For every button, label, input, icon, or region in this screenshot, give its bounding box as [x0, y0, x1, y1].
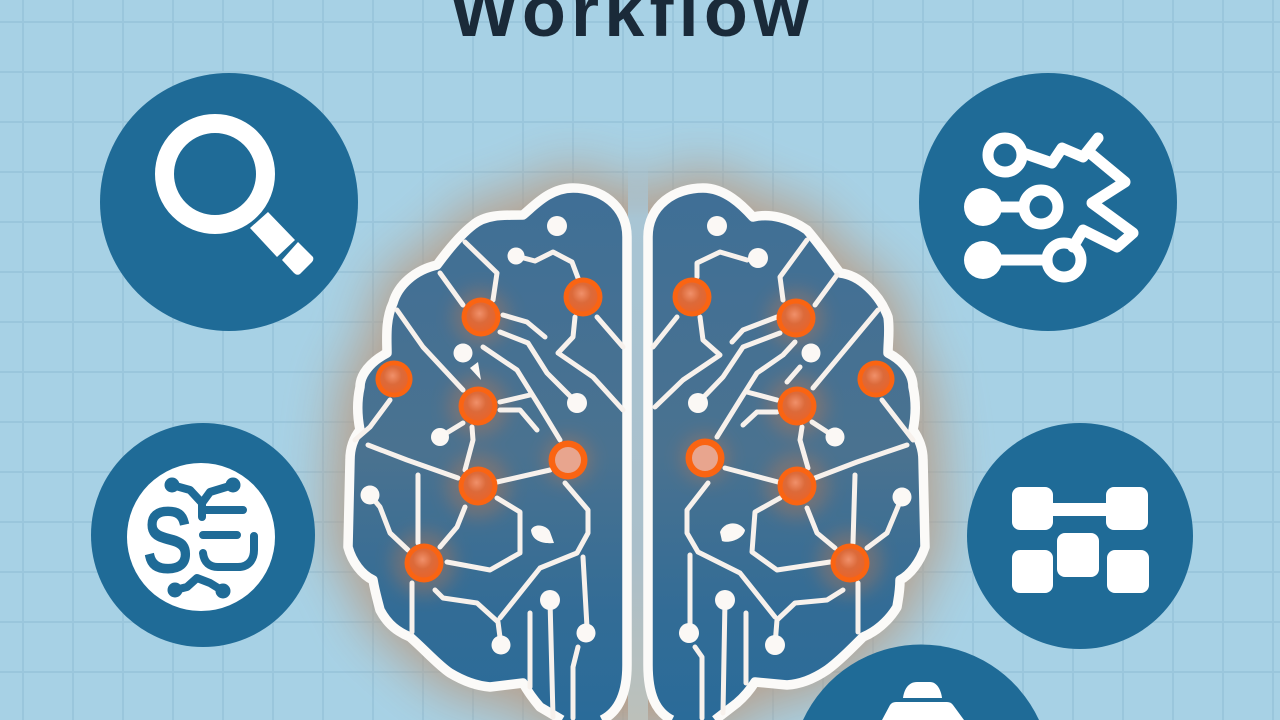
- icon: magnifying glass: [100, 73, 358, 331]
- icon: SEO badge: S: [143, 491, 192, 591]
- left orange nodes: [375, 278, 602, 582]
- icon: circuit network: [919, 73, 1177, 331]
- brain glow halo: [348, 188, 925, 720]
- brain: left hemisphere: [348, 188, 627, 720]
- right node haze: [681, 290, 882, 595]
- right circuit traces: [653, 240, 913, 718]
- left node haze: [392, 289, 592, 595]
- brain: right hemisphere: [648, 188, 925, 720]
- right circuit dots: [679, 216, 912, 655]
- icon: bottom circle with stacked shapes: [803, 645, 1039, 720]
- left circuit traces: [355, 242, 623, 718]
- gap between hemispheres: [628, 150, 648, 720]
- right orange nodes: [672, 278, 895, 582]
- icon: SEO badge: [91, 423, 315, 647]
- icon: workflow blocks: [967, 423, 1193, 649]
- left circuit dots: [360, 216, 596, 654]
